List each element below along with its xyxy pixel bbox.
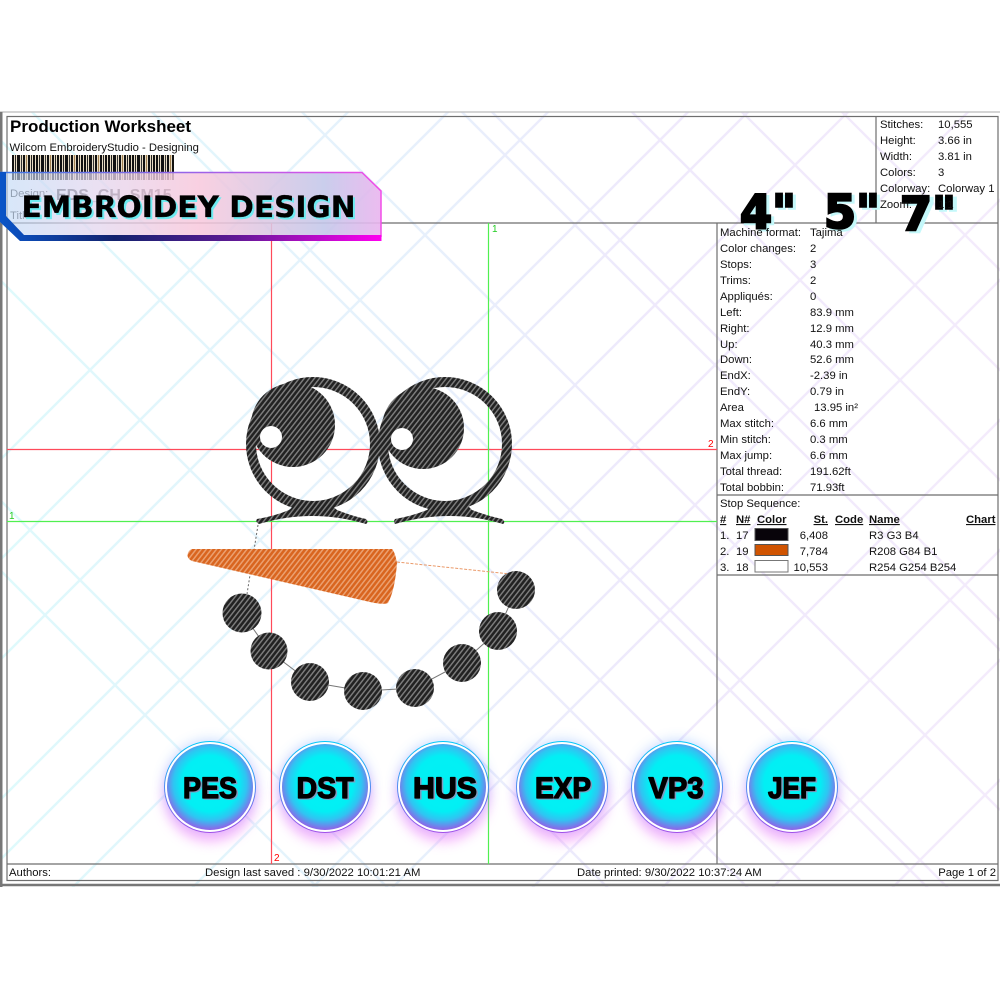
snowman face embroidery	[188, 382, 535, 710]
guide numbers: 2	[708, 439, 714, 450]
panel: stitch summary: Zoom:	[880, 199, 912, 211]
panel: machine statistics: 6.6 mm	[810, 418, 848, 430]
panel: machine statistics: 0.79 in	[810, 386, 844, 398]
badge: DST	[279, 739, 371, 842]
panel: stitch summary	[880, 119, 995, 211]
panel: stop sequence table: 10,553	[793, 562, 828, 574]
panel: machine statistics: Down:	[720, 354, 752, 366]
panel: machine statistics: Total bobbin:	[720, 482, 784, 494]
banner: embroidey design: EMBROIDEY DESIGN	[22, 190, 355, 224]
panel: stitch summary: 10,555	[938, 119, 973, 131]
panel: stop sequence table: Chart	[966, 514, 996, 526]
format badges	[164, 739, 838, 842]
panel: machine statistics: Stops:	[720, 259, 752, 271]
panel: stop sequence table: 6,408	[800, 530, 828, 542]
panel: machine statistics: 13.95 in²	[814, 402, 858, 414]
icon: right eye base	[394, 505, 504, 524]
icon: left eye	[251, 382, 375, 506]
panel: machine statistics: 40.3 mm	[810, 339, 854, 351]
footer: Design last saved : 9/30/2022 10:01:21 AM	[205, 867, 420, 879]
panel: stop sequence table: R254 G254 B254	[869, 562, 956, 574]
panel: machine statistics: 2	[810, 275, 816, 287]
panel: stitch summary: 3	[938, 167, 944, 179]
panel: stitch summary: 3.81 in	[938, 151, 972, 163]
jump stitch connectors	[242, 590, 516, 691]
panel: machine statistics: 52.6 mm	[810, 354, 854, 366]
badge: VP3: VP3	[650, 773, 705, 806]
panel: machine statistics: 2	[810, 243, 816, 255]
panel: machine statistics: Tajima	[810, 227, 843, 239]
banner: embroidey design	[0, 172, 382, 241]
badge: JEF	[746, 739, 838, 842]
icon: right eye	[382, 382, 507, 506]
guide numbers: 2	[274, 853, 280, 864]
design and title labels	[10, 187, 172, 222]
panel: machine statistics: EndY:	[720, 386, 750, 398]
badge: JEF: JEF	[770, 773, 818, 806]
hoop sizes: 7"	[904, 189, 960, 243]
panel: stop sequence table: St.	[814, 514, 828, 526]
guide lines	[7, 223, 717, 864]
design and title labels: Design:	[10, 188, 48, 200]
panel: machine statistics: 0.3 mm	[810, 434, 848, 446]
panel: stop sequence table: 18	[736, 562, 749, 574]
panel: stop sequence table: R208 G84 B1	[869, 546, 937, 558]
header: title and software line: Production Worksheet	[10, 117, 191, 136]
panel: machine statistics: Total thread:	[720, 466, 782, 478]
panel: machine statistics: Up:	[720, 339, 738, 351]
badge: HUS: HUS	[414, 773, 478, 806]
badge: HUS	[397, 739, 489, 842]
panel: machine statistics: Min stitch:	[720, 434, 771, 446]
panel: machine statistics: 0	[810, 291, 816, 303]
panel: stitch summary: Colorway:	[880, 183, 930, 195]
hoop sizes: 4"	[740, 185, 796, 239]
guide numbers: 1	[9, 511, 15, 522]
panel: machine statistics: EndX:	[720, 370, 751, 382]
icon: left eye base	[256, 505, 368, 524]
badge: DST: DST	[296, 772, 354, 805]
footer: Page 1 of 2	[938, 867, 996, 879]
panel: machine statistics: Max jump:	[720, 450, 772, 462]
badge: DST: DST	[298, 773, 355, 806]
panel: stop sequence table: 17	[736, 530, 749, 542]
panel: machine statistics: 12.9 mm	[810, 323, 854, 335]
dotted jump stitch	[247, 525, 258, 594]
panel: machine statistics: 3	[810, 259, 816, 271]
badge: HUS: HUS	[413, 772, 477, 805]
panel: stitch summary: Height:	[880, 135, 916, 147]
panel: stop sequence table: #	[720, 514, 727, 526]
header: title and software line	[10, 117, 199, 154]
panel: stop sequence table	[720, 498, 996, 574]
design and title labels: EDS_CH_SM15	[56, 187, 172, 204]
barcode	[12, 155, 174, 180]
panel: machine statistics: Trims:	[720, 275, 751, 287]
smile beads	[222, 571, 535, 710]
panel: machine statistics: 6.6 mm	[810, 450, 848, 462]
panel: machine statistics: Max stitch:	[720, 418, 774, 430]
panel: machine statistics: Machine format:	[720, 227, 801, 239]
icon: carrot nose	[188, 549, 397, 604]
badge: PES: PES	[183, 772, 237, 805]
panel: stop sequence table: N#	[736, 514, 751, 526]
background diagonal line pattern	[2, 112, 1000, 887]
panel: stitch summary: 3.66 in	[938, 135, 972, 147]
panel: machine statistics: 191.62ft	[810, 466, 852, 478]
badge: PES: PES	[184, 773, 238, 806]
badge: EXP: EXP	[535, 772, 591, 805]
badge: EXP: EXP	[536, 773, 592, 806]
footer	[9, 867, 996, 879]
panel: machine statistics	[720, 227, 858, 494]
hoop sizes: 5"	[827, 187, 883, 241]
panel: stitch summary: 1:1	[938, 199, 954, 211]
panel: machine statistics: Area	[720, 402, 745, 414]
panel: machine statistics: Left:	[720, 307, 742, 319]
hoop sizes: 7"	[900, 187, 956, 241]
header: title and software line: Wilcom EmbroideryStudio - Designing	[10, 142, 199, 154]
badge: EXP	[516, 739, 608, 842]
panel: stop sequence table: Color	[757, 514, 787, 526]
panel: stop sequence table: R3 G3 B4	[869, 530, 919, 542]
panel: stitch summary: Stitches:	[880, 119, 923, 131]
carrot trailing stitch	[397, 562, 510, 574]
panel: stop sequence table: 19	[736, 546, 749, 558]
hoop sizes	[740, 185, 960, 243]
panel: machine statistics: 83.9 mm	[810, 307, 854, 319]
panel: stop sequence table: 1.	[720, 530, 729, 542]
panel: machine statistics: Color changes:	[720, 243, 796, 255]
panel: stitch summary: Width:	[880, 151, 912, 163]
panel: machine statistics: Appliqués:	[720, 291, 773, 303]
panel: stop sequence table: Stop Sequence:	[720, 498, 800, 510]
badge: PES	[164, 739, 256, 842]
badge: VP3	[631, 739, 723, 842]
panel: stop sequence table: 3.	[720, 562, 729, 574]
guide numbers	[9, 224, 714, 864]
guide numbers: 1	[492, 224, 498, 235]
panel: stop sequence table: 7,784	[800, 546, 828, 558]
badge: JEF: JEF	[768, 772, 816, 805]
panel: stop sequence table: Name	[869, 514, 900, 526]
banner: embroidey design: EMBROIDEY DESIGN	[24, 192, 357, 226]
panel: stitch summary: Colors:	[880, 167, 916, 179]
panel: machine statistics: 71.93ft	[810, 482, 845, 494]
footer: Authors:	[9, 867, 51, 879]
panel: machine statistics: -2.39 in	[810, 370, 848, 382]
panel: stitch summary: Colorway 1	[938, 183, 995, 195]
hoop sizes: 5"	[824, 185, 880, 239]
design and title labels: Title:	[10, 210, 34, 222]
panel: stop sequence table: Code	[835, 514, 863, 526]
badge: VP3: VP3	[648, 772, 704, 805]
panel: stop sequence table: 2.	[720, 546, 729, 558]
footer: Date printed: 9/30/2022 10:37:24 AM	[577, 867, 762, 879]
worksheet frame	[0, 112, 1000, 887]
panel: machine statistics: Right:	[720, 323, 750, 335]
hoop sizes: 4"	[743, 187, 799, 241]
